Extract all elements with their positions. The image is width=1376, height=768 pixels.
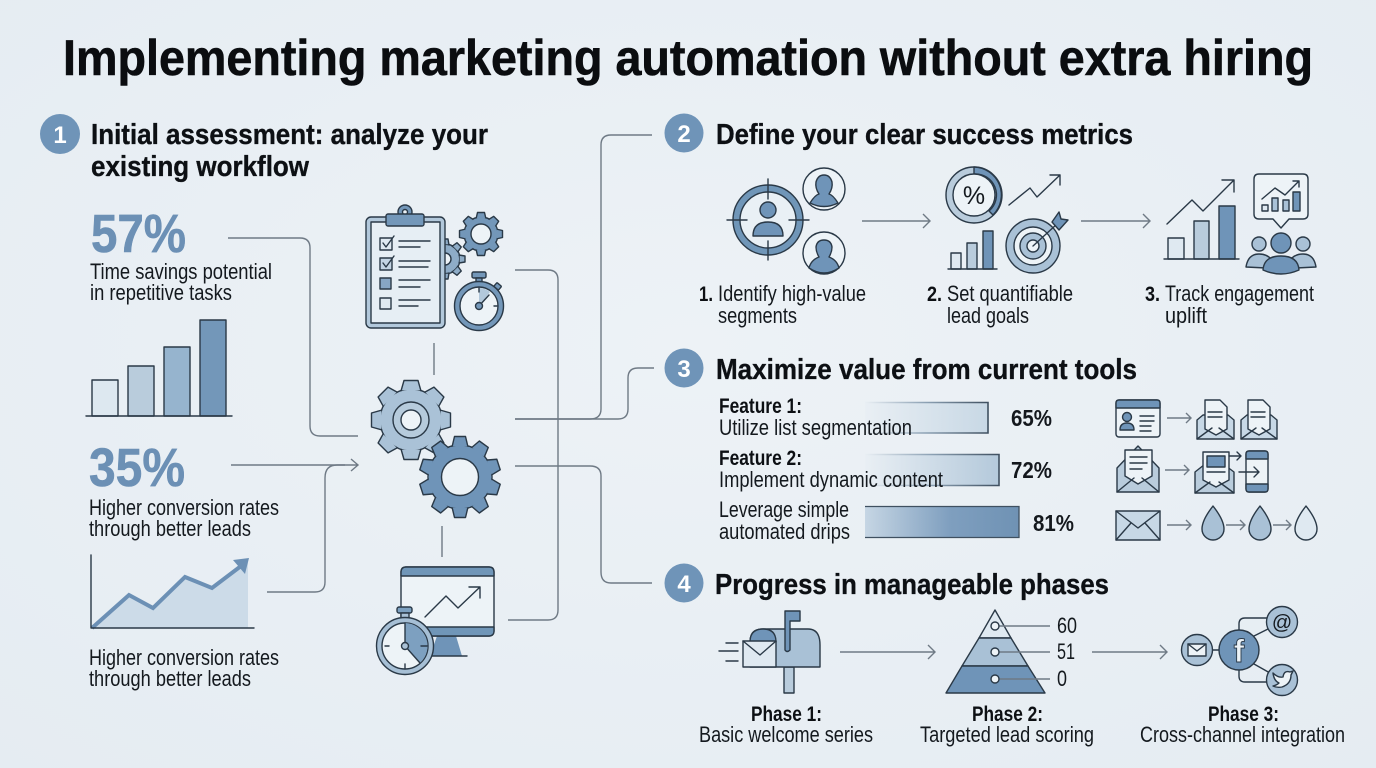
pyramid values: 0 [1057, 666, 1067, 691]
feature labels: Feature 2: [719, 447, 802, 470]
icon: clipboard [366, 205, 445, 328]
heading 1: Initial assessment: analyze your [91, 119, 488, 151]
icon: channel network [1182, 606, 1298, 696]
feature labels: Implement dynamic content [719, 467, 943, 492]
icon: dark gear [419, 436, 501, 518]
phase labels: Phase 1: [751, 703, 822, 726]
bar chart [86, 320, 232, 416]
progress bars [865, 402, 1019, 538]
arrow [1092, 645, 1167, 659]
stat: 57%: 57% [91, 204, 186, 264]
icon: channel network: @ [1272, 612, 1292, 634]
step labels: uplift [1165, 303, 1207, 328]
number badge 3: 3 [677, 356, 691, 383]
icon: overlapping stopwatch [376, 607, 434, 674]
pyramid values: 51 [1057, 639, 1075, 664]
step labels: 3. [1145, 283, 1160, 306]
panel: section 1 initial assessment [40, 114, 488, 691]
icon: central gears [372, 380, 501, 518]
heading 1: existing workflow [91, 151, 309, 183]
heading 1 [91, 119, 488, 183]
area line chart [91, 555, 254, 628]
phase labels: Basic welcome series [699, 722, 873, 747]
icon: growth chart and audience [1164, 174, 1316, 274]
stat: 57%: in repetitive tasks [90, 280, 232, 305]
icon row: dynamic content [1117, 446, 1268, 493]
heading 4: Progress in manageable phases [715, 569, 1109, 601]
pyramid values [1057, 613, 1077, 691]
connector lines between sections [228, 135, 654, 620]
phase labels: Targeted lead scoring [920, 722, 1094, 747]
step labels: segments [718, 303, 797, 328]
percent values [1011, 405, 1074, 536]
icon: half gear behind clipboard [430, 239, 465, 279]
number badge 1 [40, 114, 80, 154]
icon row: automated drips [1116, 506, 1317, 540]
feature labels: automated drips [719, 519, 850, 544]
number badge 4: 4 [677, 571, 691, 598]
icon: mailbox [719, 611, 820, 693]
title: Implementing marketing automation without extra hiring [63, 30, 1313, 86]
icon: light gear [372, 380, 450, 460]
step labels [699, 281, 1314, 328]
stat: 57%: Time savings potential [90, 259, 272, 284]
panel: section 2 success metrics [664, 114, 1316, 328]
number badge 2: 2 [677, 121, 691, 148]
heading 2: Define your clear success metrics [716, 119, 1133, 151]
feature labels: Feature 1: [719, 395, 802, 418]
step labels: 1. [699, 283, 713, 306]
pyramid values: 60 [1057, 613, 1077, 638]
arrow [1081, 214, 1150, 228]
step labels: Set quantifiable [947, 281, 1073, 306]
icon: percent gauge, bars and dart target [946, 167, 1068, 273]
arrow [862, 214, 930, 228]
icon: monitor with stopwatch [376, 567, 494, 674]
step labels: Track engagement [1165, 281, 1314, 306]
icon: stopwatch [454, 272, 504, 330]
caption under area chart [89, 645, 279, 691]
phase labels: Phase 2: [972, 703, 1043, 726]
stat: 35% [89, 438, 279, 541]
icon: scoring pyramid [946, 610, 1050, 693]
caption under area chart: Higher conversion rates [89, 645, 279, 670]
icon: channel network: f [1234, 633, 1245, 669]
feature labels: Leverage simple [719, 497, 849, 522]
feature labels: Utilize list segmentation [719, 415, 912, 440]
stat: 35%: 35% [89, 438, 185, 498]
number badge 2 [664, 114, 704, 152]
number badge 3 [664, 348, 704, 388]
panel: section 3 current tools [664, 348, 1317, 544]
feature labels [719, 395, 943, 544]
icon: percent gauge, bars and dart target: % [963, 182, 985, 210]
percent values: 72% [1011, 457, 1052, 483]
arrow [840, 645, 935, 659]
icon: target segment with people [727, 168, 845, 274]
heading 3: Maximize value from current tools [716, 354, 1137, 386]
caption under area chart: through better leads [89, 666, 251, 691]
step labels: Identify high-value [718, 281, 866, 306]
percent values: 81% [1033, 510, 1074, 536]
stat: 35%: Higher conversion rates [89, 495, 279, 520]
icon row: list segmentation [1116, 400, 1277, 439]
number badge 1: 1 [53, 122, 67, 149]
step labels: lead goals [947, 303, 1029, 328]
panel: section 4 phases [664, 564, 1345, 747]
step labels: 2. [927, 283, 942, 306]
stat: 57% [90, 204, 272, 305]
icon: small gear [460, 212, 502, 256]
number badge 4 [664, 564, 704, 602]
stat: 35%: through better leads [89, 516, 251, 541]
phase labels: Phase 3: [1208, 703, 1279, 726]
phase labels [699, 703, 1345, 747]
icon: monitor [401, 567, 494, 656]
icon: clipboard checklist with gears and stopwatch [366, 205, 504, 330]
percent values: 65% [1011, 405, 1052, 431]
